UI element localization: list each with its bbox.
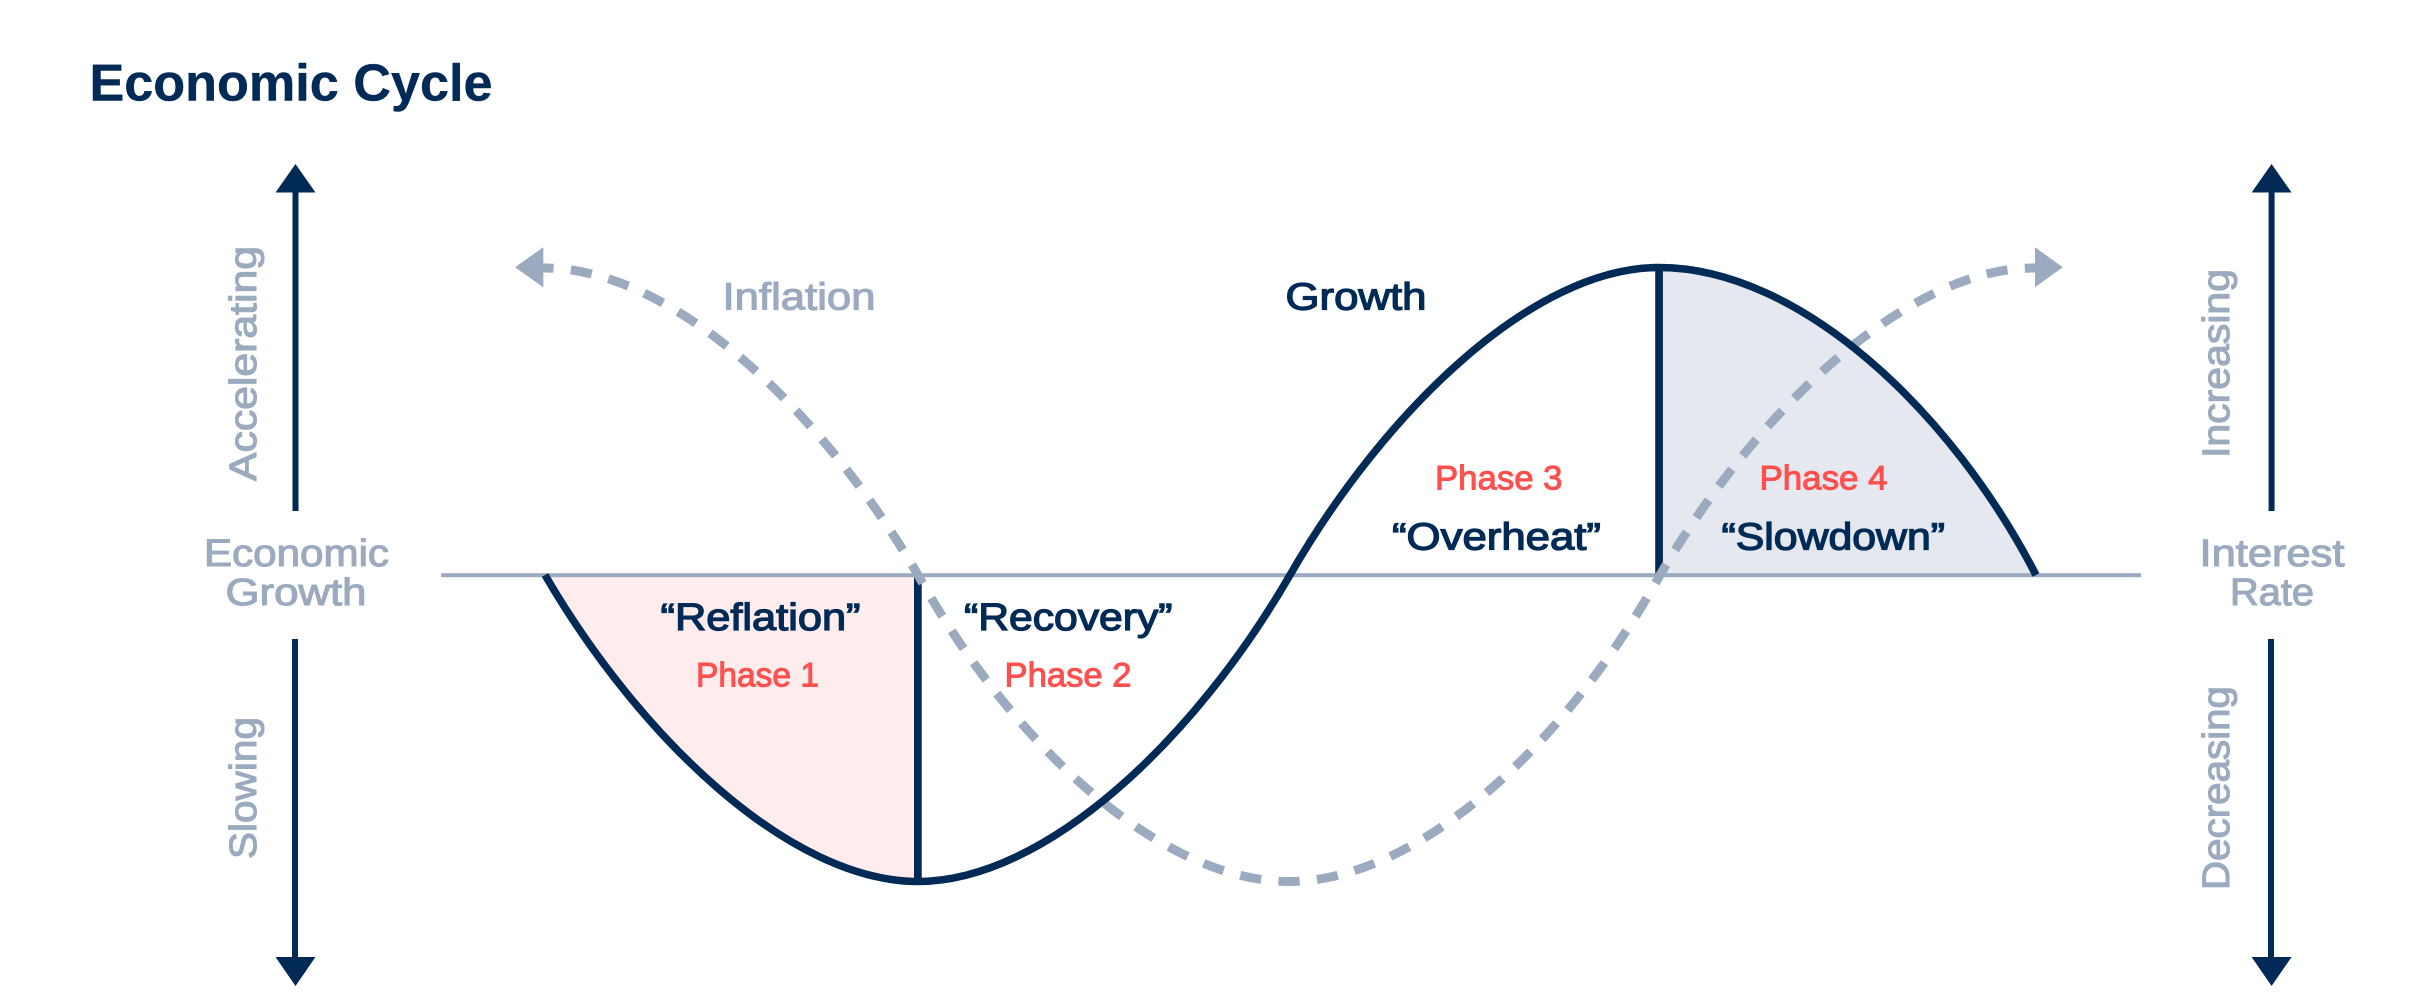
divider: trough marker — [914, 575, 922, 882]
label: reflation: “Reflation” — [660, 597, 860, 639]
arrow: inflation right — [2035, 247, 2063, 287]
growth curve — [545, 268, 2036, 882]
label: growth: Growth — [1286, 276, 1426, 318]
phase 1 shaded area — [545, 575, 918, 882]
arrow: accelerating — [276, 164, 316, 511]
title: Economic Cycle — [90, 54, 492, 112]
label: slowing: Slowing — [223, 717, 265, 859]
horizontal axis — [441, 573, 2141, 577]
panel: left axis economic growth — [204, 164, 389, 986]
label: phase 1: Phase 1 — [696, 657, 819, 695]
label: interest rate: Rate — [2230, 572, 2314, 614]
arrow: slowing — [276, 639, 316, 986]
label: overheat: “Overheat” — [1392, 516, 1601, 558]
arrow: decreasing — [2252, 639, 2292, 986]
label: interest rate: Interest — [2200, 533, 2345, 575]
label: decreasing: Decreasing — [2196, 686, 2238, 890]
arrow: inflation left — [515, 247, 543, 287]
panel: right axis interest rate — [2196, 164, 2345, 986]
label: recovery: “Recovery” — [964, 597, 1172, 639]
label: increasing: Increasing — [2196, 269, 2238, 458]
label: economic growth: Economic — [204, 533, 389, 575]
label: economic growth: Growth — [226, 572, 366, 614]
label: phase 3: Phase 3 — [1435, 459, 1562, 497]
label: phase 4: Phase 4 — [1760, 459, 1888, 497]
panel: economic cycle chart — [441, 247, 2141, 882]
divider: peak marker — [1655, 268, 1663, 575]
label: interest rate — [2200, 533, 2345, 614]
label: economic growth — [204, 533, 389, 614]
label: slowdown: “Slowdown” — [1722, 516, 1945, 558]
label: accelerating: Accelerating — [223, 246, 265, 481]
phase 4 shaded area — [1659, 268, 2036, 575]
inflation dashed curve — [532, 268, 2046, 882]
arrow: increasing — [2252, 164, 2292, 511]
label: phase 2: Phase 2 — [1004, 657, 1132, 695]
label: inflation: Inflation — [722, 276, 876, 318]
